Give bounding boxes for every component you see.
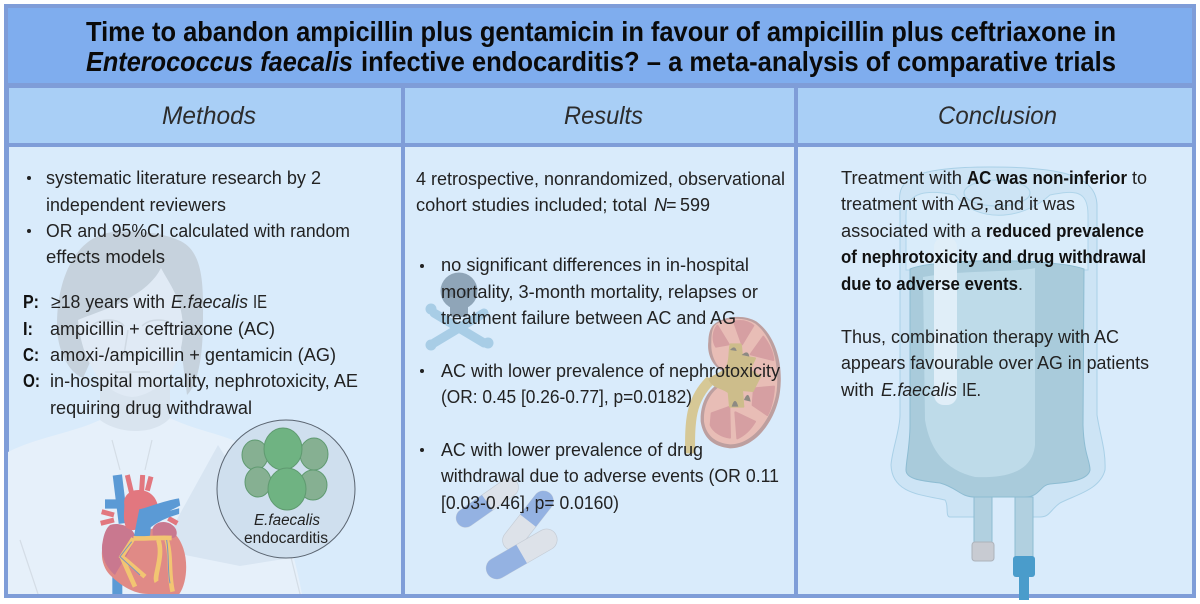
text: PICO: O: <box>23 371 40 391</box>
text: conclusion second paragraph: appears favourable over AG in patients <box>841 353 1149 373</box>
text: results bullets: [0.03-0.46], p= 0.0160) <box>441 493 619 513</box>
icon: IV tube connector <box>1013 556 1035 600</box>
text: results bullets: mortality, 3-month mortality, relapses or <box>441 282 758 302</box>
callout: E. faecalis circle: E.faecalis <box>254 512 320 529</box>
text: study summary: = <box>666 195 677 215</box>
title: Time to abandon ampicillin plus gentamicin in favour of ampicillin plus ceftriaxone in <box>86 16 1116 47</box>
text: conclusion first paragraph: treatment with AG, and it was <box>841 194 1075 214</box>
text: methods bullets: independent reviewers <box>46 195 226 215</box>
text: PICO: requiring drug withdrawal <box>50 398 252 418</box>
text: study summary: 4 retrospective, nonrandomized, observational <box>416 169 785 189</box>
text: conclusion first paragraph: . <box>1018 274 1023 294</box>
illustration: heart <box>101 475 186 594</box>
text: PICO: ampicillin + ceftriaxone (AC) <box>50 319 275 339</box>
text: study summary <box>416 169 785 215</box>
illustration: patient silhouette <box>8 232 302 594</box>
text: PICO: I: <box>23 319 33 339</box>
callout: E. faecalis circle: endocarditis <box>244 530 328 547</box>
callout: E. faecalis circle <box>217 420 355 558</box>
text: conclusion first paragraph: Treatment with <box>841 168 962 188</box>
icon: bacteria cluster <box>242 428 328 510</box>
text: conclusion first paragraph: of nephrotoxicity and drug withdrawal <box>841 247 1146 267</box>
text: conclusion first paragraph: associated with a <box>841 221 982 241</box>
text: PICO: IE <box>253 292 267 312</box>
text: study summary: 599 <box>680 195 710 215</box>
text: PICO: in-hospital mortality, nephrotoxicity, AE <box>50 371 358 391</box>
text: results bullets: no significant differences in in-hospital <box>441 255 749 275</box>
title <box>86 16 1116 77</box>
text: PICO: C: <box>23 345 39 365</box>
text: PICO: E.faecalis <box>171 292 248 312</box>
text: PICO: amoxi-/ampicillin + gentamicin (AG) <box>50 345 336 365</box>
text: results bullets: treatment failure between AC and AG <box>441 308 736 328</box>
text: results bullets: withdrawal due to adverse events (OR 0.11 <box>440 466 779 486</box>
icon: capsules <box>452 474 561 583</box>
text: study summary: N <box>654 195 668 215</box>
title: infective endocarditis? – a meta-analysis of comparative trials <box>361 46 1116 77</box>
text: conclusion second paragraph: Thus, combination therapy with AC <box>841 327 1119 347</box>
icon: kidney <box>690 317 781 453</box>
heading: methods: Methods <box>162 102 256 130</box>
text: results bullets <box>420 255 780 513</box>
text: study summary: cohort studies included; total <box>416 195 647 215</box>
panel: results <box>405 88 794 594</box>
text: PICO <box>23 292 358 418</box>
panel: conclusion <box>798 88 1192 600</box>
heading: conclusion <box>798 88 1192 143</box>
text: conclusion second paragraph: with <box>840 380 874 400</box>
text: conclusion first paragraph: to <box>1132 168 1147 188</box>
title: Enterococcus faecalis <box>86 46 353 77</box>
text: methods bullets <box>27 168 350 267</box>
heading: methods <box>9 88 401 143</box>
text: conclusion first paragraph <box>841 168 1147 294</box>
heading: results: Results <box>564 102 643 130</box>
text: conclusion second paragraph <box>840 327 1149 400</box>
illustration: IV bag <box>891 167 1105 561</box>
text: methods bullets: systematic literature research by 2 <box>46 168 321 188</box>
icon: skull and crossbones <box>426 272 494 350</box>
text: conclusion first paragraph: due to adverse events <box>841 274 1018 294</box>
text: PICO: ≥18 years with <box>51 292 165 312</box>
text: conclusion first paragraph: AC was non-inferior <box>967 168 1127 188</box>
text: methods bullets: effects models <box>46 247 165 267</box>
text: conclusion first paragraph: reduced prevalence <box>986 221 1144 241</box>
text: results bullets: AC with lower prevalence of nephrotoxicity <box>441 361 780 381</box>
text: conclusion second paragraph: IE. <box>962 380 981 400</box>
text: results bullets: AC with lower prevalence of drug <box>441 440 703 460</box>
panel: methods <box>8 88 401 594</box>
text: conclusion second paragraph: E.faecalis <box>881 380 957 400</box>
heading: conclusion: Conclusion <box>938 102 1057 130</box>
text: results bullets: (OR: 0.45 [0.26-0.77], p=0.0182) <box>441 387 692 407</box>
text: PICO: P: <box>23 292 39 312</box>
heading: results <box>405 88 794 143</box>
text: methods bullets: OR and 95%CI calculated with random <box>46 221 350 241</box>
